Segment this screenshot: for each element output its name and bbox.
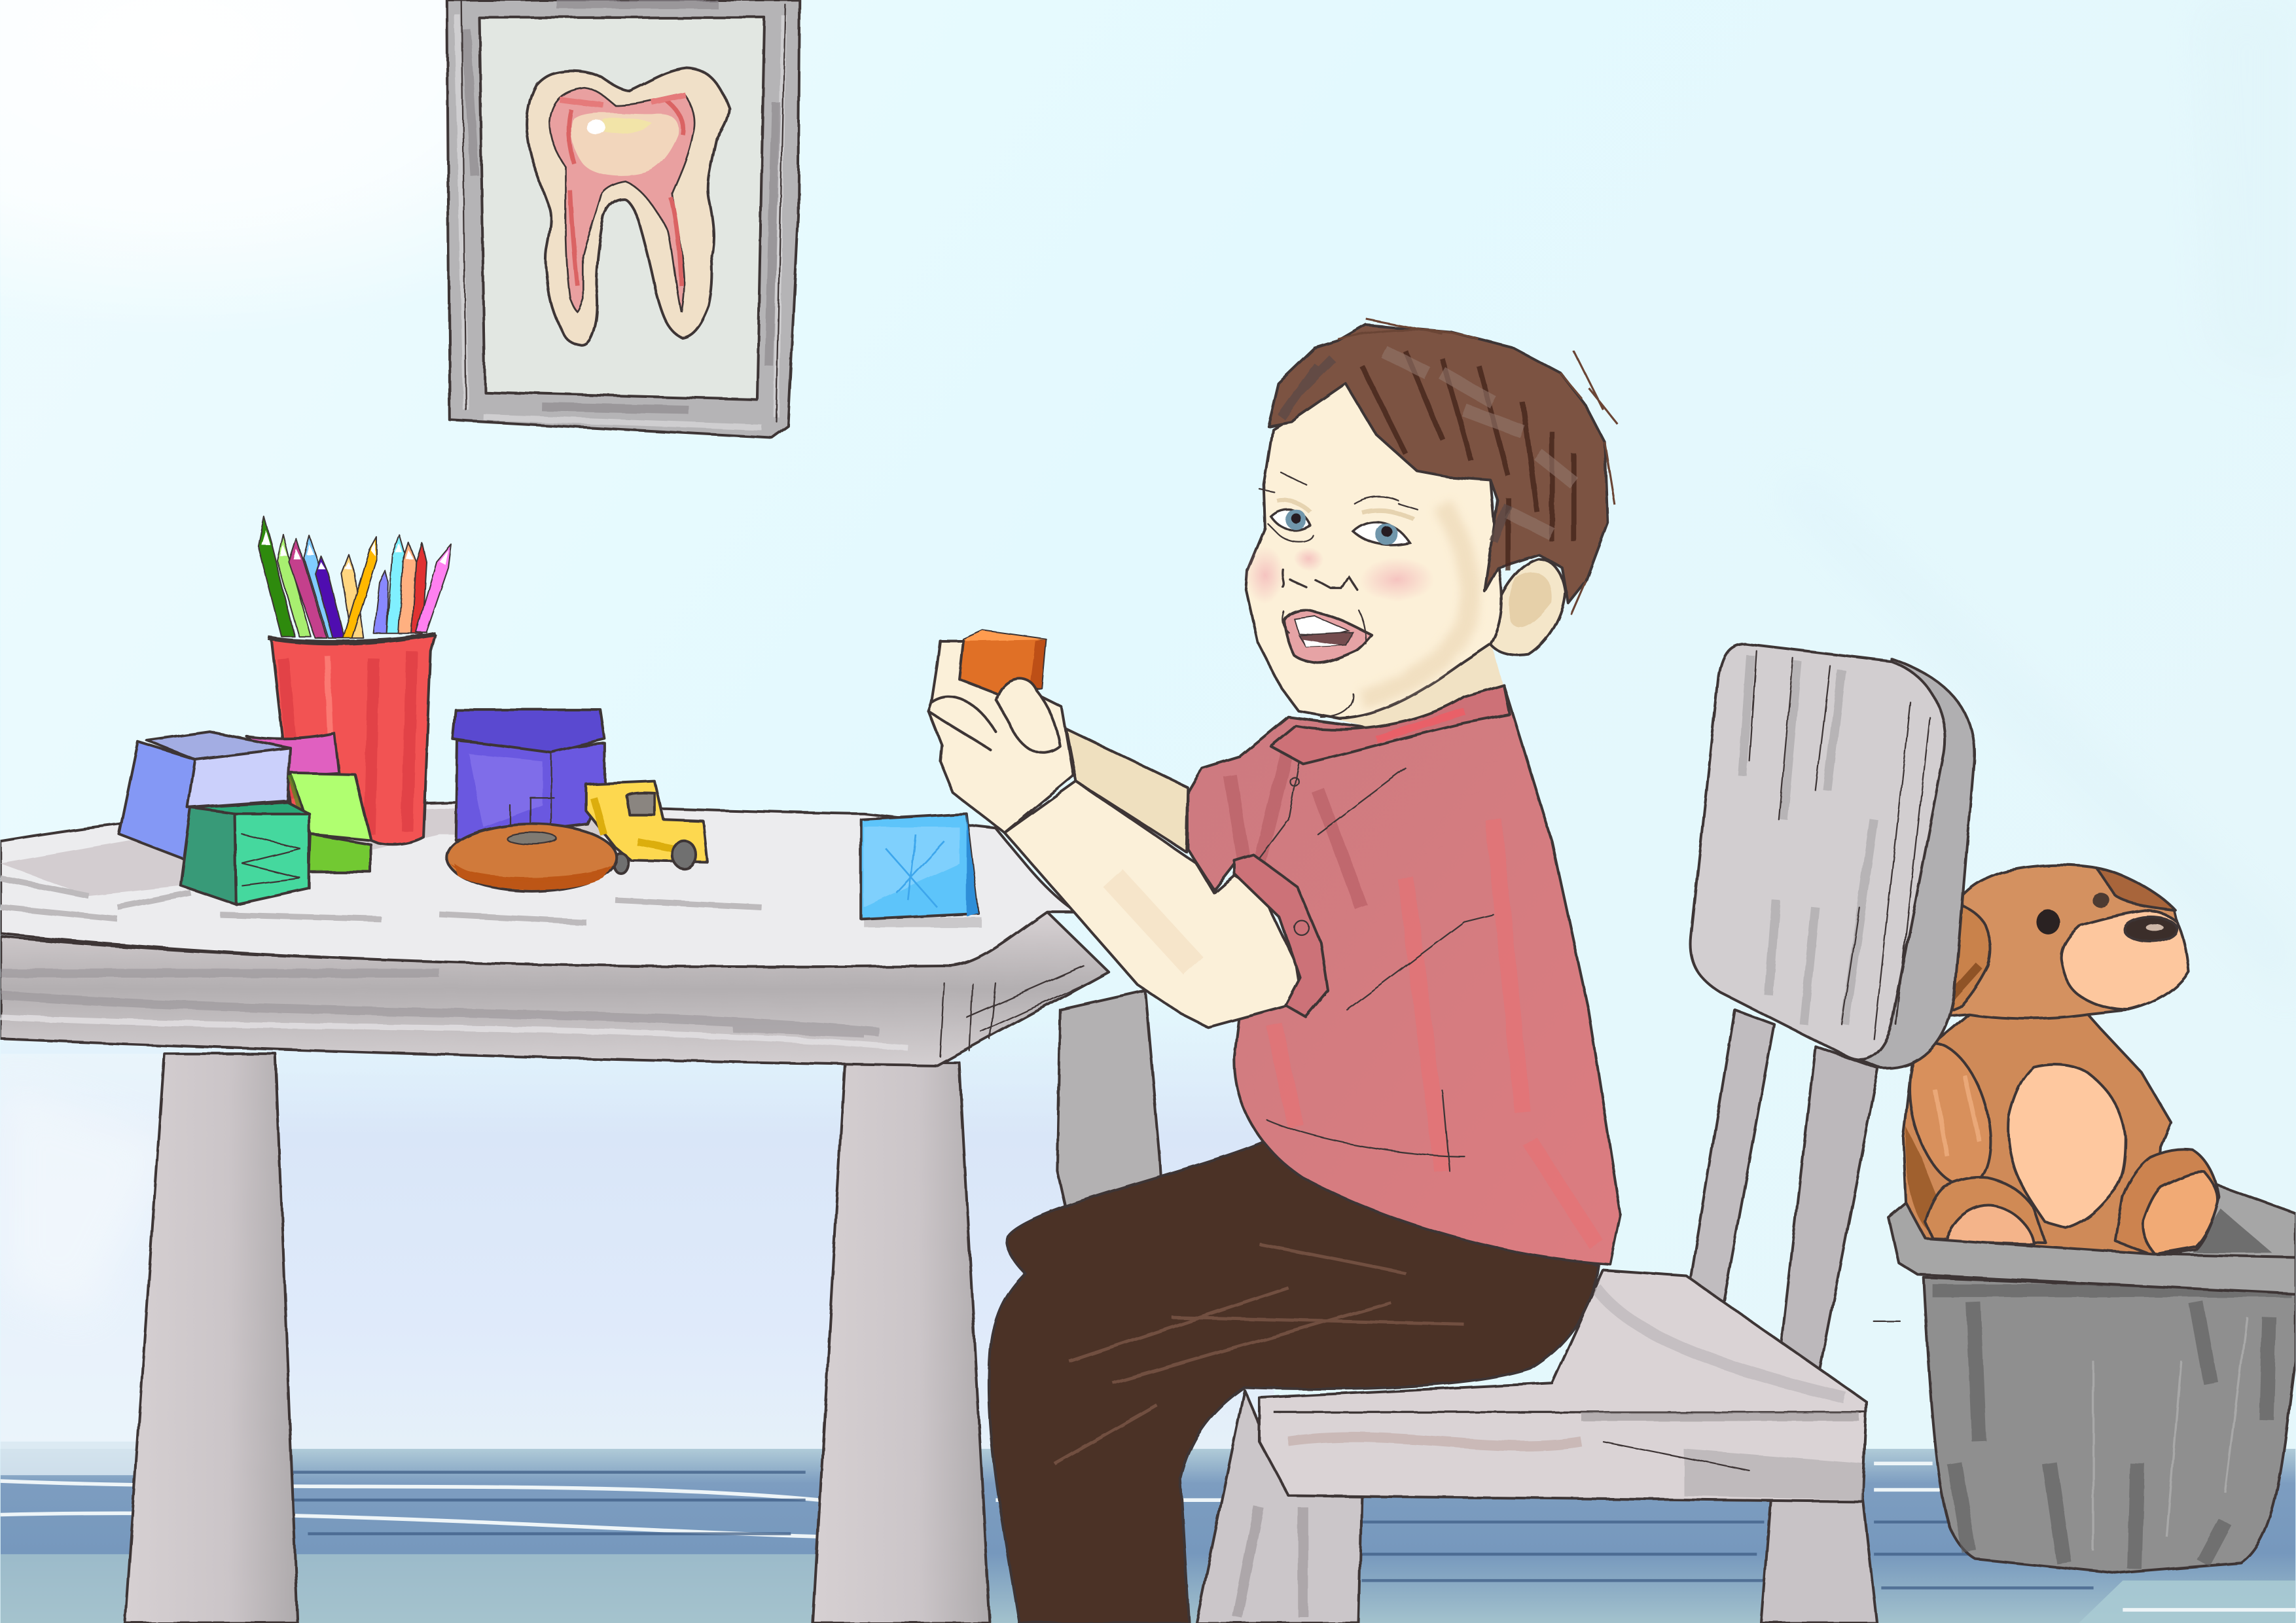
green block: [181, 802, 310, 904]
backrest side: [1852, 658, 1975, 1069]
chair upright right: [1778, 1046, 1878, 1393]
chair seat: [1259, 1270, 1867, 1501]
chair backrest: [1691, 644, 1975, 1069]
shirt button: [1290, 777, 1299, 786]
hair: [1268, 319, 1618, 615]
pencils: [258, 516, 452, 638]
blue block: [119, 732, 291, 861]
table side edge: [1, 912, 1109, 1065]
right cheek: [1359, 558, 1435, 601]
bin rim: [1889, 1203, 2295, 1294]
left cheek: [1246, 546, 1284, 605]
shirt: [1187, 685, 1621, 1264]
collar: [1271, 685, 1509, 764]
poster: tooth diagram: [447, 0, 800, 438]
orange toy block: [960, 631, 1045, 694]
chair right leg: [1761, 1493, 1877, 1623]
bear snout: [2061, 910, 2189, 1010]
bin inner lid edge: [2166, 1183, 2295, 1288]
face shading: [1361, 505, 1470, 700]
bin body: [1924, 1277, 2295, 1573]
bear nose: [2125, 917, 2177, 942]
face: [1246, 383, 1501, 719]
fingers: [929, 678, 1060, 753]
near arm: [1005, 781, 1300, 1027]
toy truck: [586, 781, 708, 874]
bear hanging ear: [1933, 903, 1991, 1018]
storage bin: [1889, 865, 2295, 1573]
bear right foot: [2115, 1150, 2219, 1256]
bear body: [1903, 1014, 2171, 1256]
toy blocks and toys: [119, 710, 978, 919]
pencil cup with pencils: [258, 516, 452, 844]
chair upright left: [1688, 1010, 1774, 1313]
table far leg: [1057, 991, 1186, 1610]
bear eyes: [2036, 893, 2109, 935]
tooth pulp: [549, 88, 694, 312]
table top surface: [1, 802, 1076, 967]
pencil tips: [261, 530, 448, 569]
pulp chamber highlight: [571, 113, 679, 175]
purple box: [453, 710, 605, 840]
table middle leg: [813, 1063, 990, 1623]
eyes: [1259, 473, 1417, 545]
tooth illustration: [527, 68, 729, 346]
hand: [929, 641, 1073, 832]
table left leg: [125, 1054, 298, 1623]
bear arm: [1895, 1035, 2005, 1196]
nose: [1282, 569, 1357, 590]
ear: [1488, 559, 1565, 655]
bear far ear: [2096, 868, 2176, 910]
chair front left leg: [1196, 1390, 1361, 1623]
cuff: [1234, 855, 1328, 1017]
hair wisps: [1338, 319, 1618, 615]
pink block: [246, 733, 338, 776]
bear belly: [2008, 1064, 2126, 1228]
red cup: [271, 635, 435, 844]
far arm: [1066, 729, 1187, 851]
poster frame: [447, 0, 800, 438]
light blue block: [861, 813, 978, 919]
lime block: [291, 773, 371, 872]
bear left foot: [1925, 1177, 2045, 1243]
boy: [929, 319, 1621, 1623]
mouth: [1284, 610, 1372, 663]
table: [1, 802, 1109, 1623]
bear head: [1933, 865, 2189, 1018]
nose tip: [1295, 547, 1323, 571]
backrest face: [1691, 644, 1945, 1060]
chair: [1196, 644, 1975, 1623]
floor: [1, 1442, 2295, 1623]
neck: [1303, 645, 1503, 735]
trousers: [989, 1139, 1599, 1623]
tooth outline: [527, 68, 729, 346]
orange ring toy: [447, 824, 617, 891]
poster paper: [479, 18, 764, 399]
